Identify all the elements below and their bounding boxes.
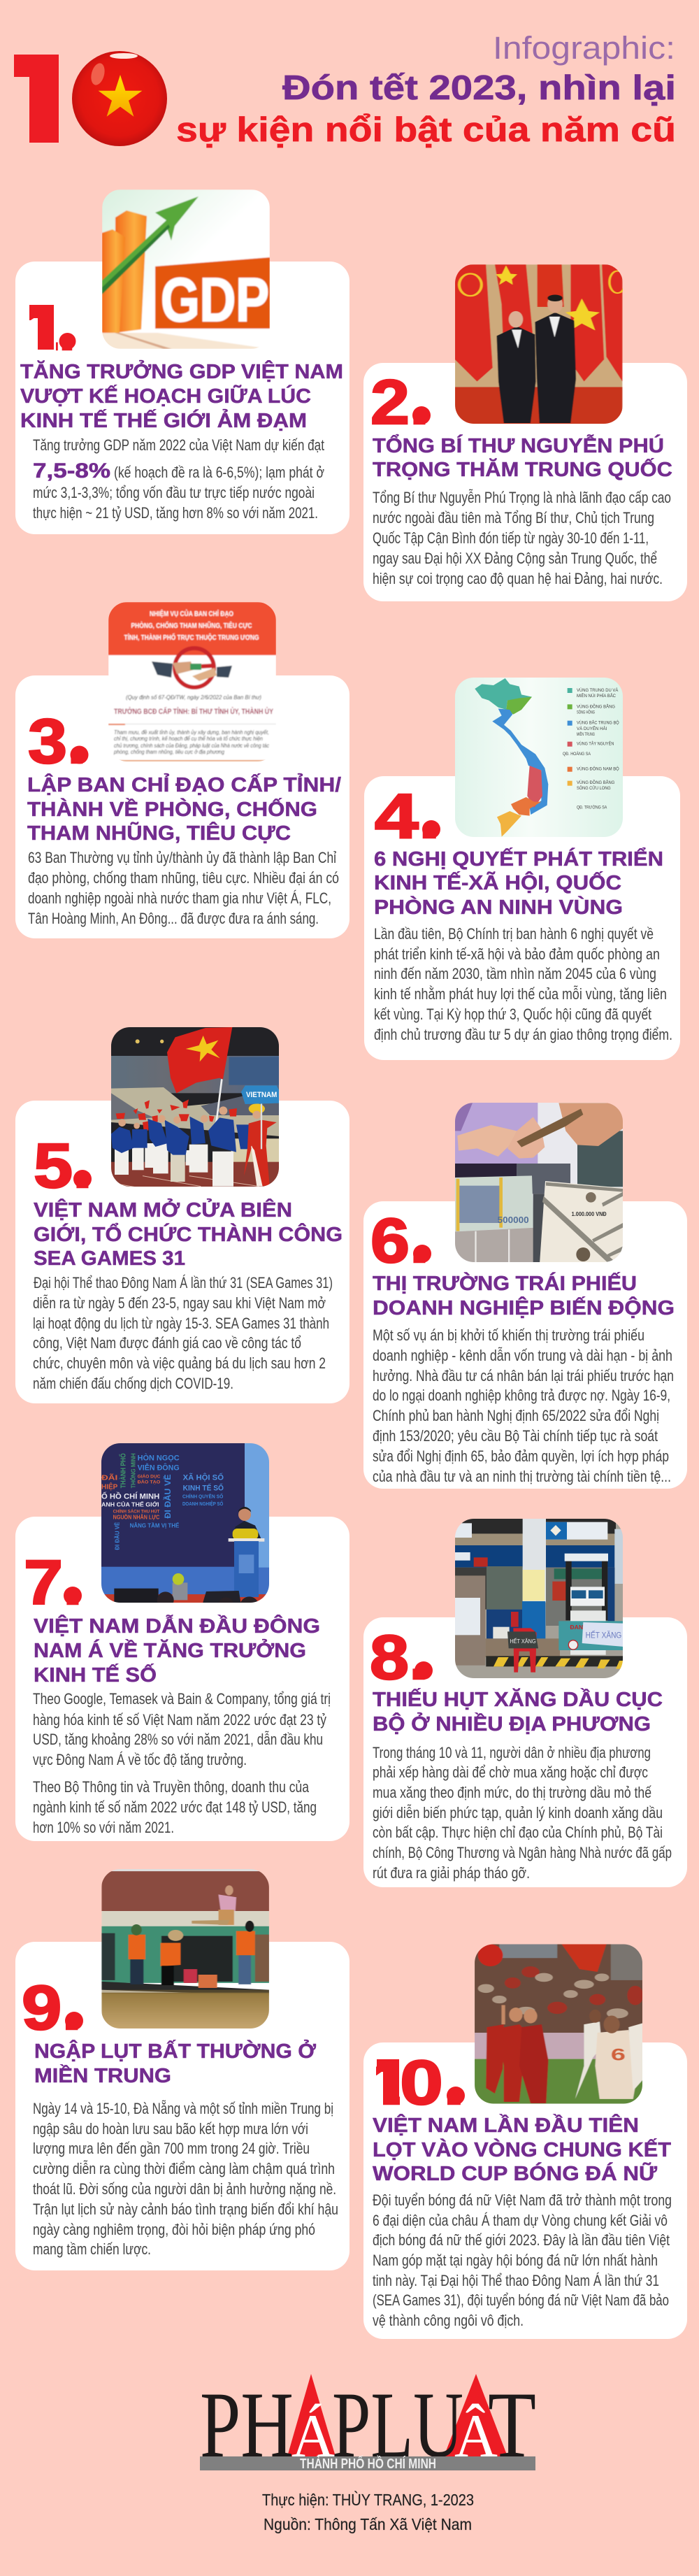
icon: Vietnam flag ball as zero (72, 51, 167, 146)
body text (373, 2191, 672, 2329)
photo: map of Vietnam regions: VÙNG TRUNG DU VÀ (577, 687, 619, 693)
body text: vệ thành công ngôi vô địch. (373, 2312, 524, 2329)
number 3: 3. (28, 707, 87, 777)
photo: digital economy forum: NGUỒN NHÂN LỰC (113, 1514, 160, 1521)
heading: 6 NGHỊ QUYẾT PHÁT TRIỂN (374, 847, 663, 871)
heading: TRỌNG THĂM TRUNG QUỐC (373, 457, 672, 481)
number 4: 4. (375, 782, 440, 852)
heading: THỊ TRƯỜNG TRÁI PHIẾU (373, 1271, 637, 1295)
body text: ngập sâu do hoàn lưu sau bão kết hợp mưa lớn với (33, 2120, 308, 2138)
heading (34, 2039, 316, 2087)
heading: PHÒNG AN NINH VÙNG (374, 895, 623, 919)
body text (33, 2100, 338, 2258)
panel: event 8 fuel shortage (363, 1517, 687, 1887)
heading: NGẬP LỤT BẤT THƯỜNG Ở (34, 2039, 316, 2063)
photo: map of Vietnam regions: VÙNG ĐÔNG NAM BỘ (577, 765, 619, 771)
photo: flood rescue (101, 1869, 269, 2028)
body text: lượng mưa lên đến gần 700 mm trong 24 giờ. Triều (33, 2140, 310, 2157)
body text: mang tầm chiến lược. (33, 2240, 151, 2258)
heading: DOANH NGHIỆP BIẾN ĐỘNG (373, 1296, 675, 1319)
heading: LỌT VÀO VÒNG CHUNG KẾT (373, 2138, 671, 2161)
photo: digital economy forum: DOANH NGHIỆP SỐ (182, 1500, 224, 1507)
body text: 7,5-8% (33, 459, 110, 482)
photo: money and bonds: 500000 (498, 1215, 529, 1225)
photo: digital economy forum: ĐÀO TẠO (138, 1479, 160, 1485)
number 7: 7. (24, 1548, 82, 1618)
number 10: 1 (373, 2048, 403, 2118)
photo: map of Vietnam regions: QĐ. HOÀNG SA (563, 750, 591, 757)
body text: ngày càng nghiêm trọng, đòi hỏi biện pháp ứng phó (33, 2221, 315, 2238)
photo: anti-corruption poster: TRƯỞNG BCĐ CẤP TỈNH: BÍ THƯ TỈNH ỦY, THÀNH ỦY (114, 707, 274, 716)
heading: VIỆT NAM DẪN ĐẦU ĐÔNG (34, 1614, 320, 1638)
logo: Pháp Luật TP.HCM: Á (291, 2403, 335, 2470)
body text (373, 1326, 674, 1485)
body text: Trận lụt lịch sử này cảnh báo tình trạng biến đổi khí hậu (33, 2201, 338, 2218)
photo: digital economy forum: HIỆP (101, 1482, 118, 1491)
body text: chức, chuyên môn và việc quảng bá du lịch sau hơn 2 (33, 1354, 326, 1372)
card background (15, 1942, 350, 2270)
body text: Đại hội Thể thao Đông Nam Á lần thứ 31 (SEA Games 31) (34, 1274, 333, 1291)
heading: KINH TẾ-XÃ HỘI, QUỐC (374, 871, 621, 894)
photo: map of Vietnam regions: VÙNG TÂY NGUYÊN (577, 740, 614, 747)
photo: anti-corruption poster: chủ trương, chính sách của Đảng, pháp luật của Nhà nước về công tác (114, 743, 269, 749)
panel: event 5 SEA Games (15, 1024, 350, 1403)
photo: closed petrol station: ĐAN (570, 1624, 583, 1631)
card background (15, 1517, 350, 1841)
heading: NAM Á VỀ TĂNG TRƯỞNG (34, 1638, 306, 1662)
body text: Theo Bộ Thông tin và Truyền thông, doanh thu của (33, 1778, 310, 1796)
photo: leaders with flags (455, 264, 626, 424)
title: line one: Đón tết 2023, nhìn lại (282, 69, 676, 107)
heading: VIỆT NAM MỞ CỬA BIÊN (34, 1198, 292, 1222)
body text (33, 1690, 331, 1836)
heading: VƯỢT KẾ HOẠCH GIỮA LÚC (20, 384, 311, 408)
heading: SEA GAMES 31 (34, 1247, 185, 1270)
body text (33, 1274, 333, 1392)
number 1: 1. (25, 294, 75, 364)
panel: event 10 women's football (363, 1945, 687, 2339)
photo: map of Vietnam regions: VÙNG BẮC TRUNG BỘ (577, 720, 619, 726)
heading (373, 1687, 663, 1736)
photo: map of Vietnam regions: VÀ DUYÊN HẢI (577, 725, 607, 731)
photo: digital economy forum: ĐI ĐẦU VỀ (114, 1522, 121, 1550)
header (14, 36, 674, 148)
heading (34, 1614, 320, 1687)
photo: anti-corruption poster: NHIỆM VỤ CỦA BAN CHỈ ĐẠO (150, 609, 233, 618)
photo: digital economy forum: ĐÃI (101, 1473, 118, 1482)
panel: event 3 anti-corruption (15, 602, 350, 938)
logo: Pháp Luật TP.HCM (200, 2373, 536, 2477)
heading: GIỚI, TỔ CHỨC THÀNH CÔNG (34, 1222, 343, 1246)
heading: THAM NHŨNG, TIÊU CỰC (27, 821, 291, 845)
panel: event 2 China visit (363, 264, 687, 601)
heading (20, 359, 343, 432)
photo: digital economy forum: CHÍNH SÁCH THU HÚT (113, 1508, 159, 1514)
body text: đạo phòng, chống tham nhũng, tiêu cực. Nhiều đại án có (28, 869, 339, 887)
photo: anti-corruption poster: chỉ thị, chương trình, kế hoạch để cụ thể hóa và tổ chức thực hiện (114, 736, 263, 742)
card background (15, 675, 350, 938)
heading: MIỀN TRUNG (34, 2063, 171, 2087)
body text (33, 436, 324, 522)
body text: Theo Google, Temasek và Bain & Company, tổng giá trị (33, 1690, 331, 1708)
heading (27, 773, 341, 845)
body text: lại hoạt động du lịch từ ngày 15-3. SEA Games 31 thành (33, 1315, 329, 1332)
number 5: 5. (34, 1131, 92, 1201)
body text: Ngày 14 và 15-10, Đà Nẵng và một số tỉnh miền Trung bị (33, 2100, 333, 2117)
heading (374, 847, 663, 919)
panel: event 1 GDP (15, 189, 350, 534)
photo: digital economy forum: VIỄN ĐÔNG (138, 1464, 180, 1473)
heading (373, 2113, 671, 2185)
photo: digital economy forum: CHÍNH QUYỀN SỐ (182, 1493, 224, 1500)
body text: cường diễn ra cùng thời điểm càng làm chậm quá trình (33, 2160, 335, 2177)
heading: TỔNG BÍ THƯ NGUYỄN PHÚ (373, 434, 664, 457)
body text: năm chiến đấu chống dịch COVID-19. (33, 1375, 233, 1392)
photo: closed petrol station: HẾT XĂNG (586, 1630, 621, 1640)
photo: women's football team: 6 (611, 2045, 626, 2064)
photo: closed petrol station (452, 1517, 626, 1685)
panel: event 7 digital economy (15, 1440, 350, 1841)
photo: money and bonds (452, 1101, 626, 1268)
body text: Tân Hoàng Minh, An Đông... đã được đưa ra ánh sáng. (28, 910, 319, 927)
photo: anti-corruption poster: Tham mưu, đề xuất tỉnh ủy, thành ủy xây dựng, ban hành nghị quyết, (114, 729, 269, 736)
card background (15, 262, 350, 534)
photo: anti-corruption poster: PHÒNG, CHỐNG THAM NHŨNG, TIÊU CỰC (131, 620, 252, 630)
heading: VIỆT NAM LẦN ĐẦU TIÊN (373, 2113, 639, 2137)
photo: map of Vietnam regions (452, 675, 626, 843)
logo: Pháp Luật TP.HCM: PH (200, 2373, 294, 2477)
photo: SEA Games parade (108, 1024, 282, 1192)
photo: map of Vietnam regions: VÙNG ĐỒNG BẰNG (577, 702, 615, 709)
panel: event 9 floods (15, 1869, 350, 2270)
card background (15, 1101, 350, 1403)
heading: BỘ Ở NHIỀU ĐỊA PHƯƠNG (373, 1712, 651, 1736)
body text (374, 925, 672, 1043)
photo: GDP chart: GDP (161, 265, 269, 334)
card background (364, 776, 680, 1060)
heading: WORLD CUP BÓNG ĐÁ NỮ (373, 2161, 658, 2185)
photo: GDP chart (102, 189, 270, 349)
title: line two: sự kiện nổi bật của năm cũ (176, 111, 676, 149)
body text: USD, tăng khoảng 28% so với năm 2021, dẫn đầu khu (33, 1731, 323, 1748)
number 1 (29, 305, 75, 351)
logo: Pháp Luật TP.HCM: THÀNH PHỐ HỒ CHÍ MINH (300, 2455, 436, 2472)
card background (363, 1617, 687, 1887)
body text: vực Đông Nam Á về tốc độ tăng trưởng. (33, 1751, 247, 1768)
photo: SEA Games parade: VIETNAM (246, 1091, 277, 1099)
photo: map of Vietnam regions: SÔNG CỬU LONG (577, 785, 611, 791)
photo: map of Vietnam regions: QĐ. TRƯỜNG SA (577, 804, 607, 810)
body text: thoát lũ. Đời sống của người dân bị ảnh hưởng nặng nề. (33, 2180, 336, 2198)
photo: digital economy forum: ĐI ĐẦU VỀ (162, 1474, 173, 1519)
heading: THÀNH VỀ PHÒNG, CHỐNG (27, 797, 317, 821)
photo: closed petrol station: HẾT XĂNG (510, 1638, 536, 1645)
photo: digital economy forum: ANH CỦA THẾ GIỚI (101, 1500, 159, 1508)
number 10: 0. (400, 2048, 465, 2118)
body text: mức 3,1-3,3%; tổng vốn đầu tư trực tiếp nước ngoài (33, 484, 315, 501)
card background (363, 363, 687, 601)
photo: women's football team (475, 1945, 643, 2105)
logo: Pháp Luật TP.HCM: T (488, 2373, 536, 2477)
photo: anti-corruption poster: phòng, chống tham nhũng, tiêu cực ở địa phương (113, 749, 224, 755)
body text: rút đưa ra giải pháp tháo gỡ. (373, 1864, 530, 1882)
body text: hàng hóa kinh tế số Việt Nam năm 2022 ước đạt 23 tỷ (33, 1711, 326, 1729)
photo: digital economy forum: THÀNH PHỐ (117, 1453, 127, 1488)
logo: Pháp Luật TP.HCM: PLU (332, 2373, 463, 2477)
credits: Thực hiện: THÙY TRANG, 1-2023 (262, 2491, 474, 2509)
photo: money and bonds: 1.000.000 VNĐ (572, 1211, 607, 1217)
body text: doanh nghiệp ngoài nhà nước tham gia như Việt Á, FLC, (28, 889, 331, 907)
heading: KINH TẾ SỐ (34, 1663, 157, 1687)
heading: KINH TẾ THẾ GIỚI ẢM ĐẠM (20, 408, 307, 432)
photo: digital economy forum: XÃ HỘI SỐ (183, 1473, 224, 1482)
body text: diễn ra từ ngày 5 đến 23-5, ngay sau khi Việt Nam mở (33, 1294, 326, 1312)
number 2: 2. (370, 368, 429, 438)
number 8: 8. (370, 1623, 428, 1693)
logo: Pháp Luật TP.HCM: Â (454, 2403, 498, 2470)
photo: digital economy forum: NÂNG TẦM VỊ THẾ (130, 1522, 180, 1529)
body text: Tăng trưởng GDP năm 2022 của Việt Nam dự kiến đạt (33, 436, 324, 454)
credits (262, 2491, 474, 2533)
photo: map of Vietnam regions: MIỀN TRUNG (577, 730, 595, 737)
photo: digital economy forum: GIÁO DỤC (138, 1473, 161, 1479)
body text (373, 489, 671, 587)
body text (28, 849, 339, 927)
heading: THIẾU HỤT XĂNG DẦU CỤC (373, 1687, 663, 1711)
photo: anti-corruption poster (108, 602, 276, 761)
body text (373, 1744, 672, 1882)
photo: anti-corruption poster: TỈNH, THÀNH PHỐ TRỰC THUỘC TRUNG ƯƠNG (124, 632, 259, 642)
body text: hơn 10% so với năm 2021. (33, 1819, 174, 1836)
number 10 (376, 2059, 465, 2106)
heading: TĂNG TRƯỞNG GDP VIỆT NAM (20, 359, 343, 383)
body text: ngành kinh tế số năm 2022 ước đạt 148 tỷ USD, tăng (33, 1798, 317, 1816)
photo: digital economy forum: KINH TẾ SỐ (183, 1482, 224, 1492)
number 9: 9. (22, 1973, 82, 2043)
heading (373, 434, 672, 481)
photo: map of Vietnam regions: VÙNG ĐỒNG BẰNG (577, 778, 614, 785)
heading (34, 1198, 343, 1270)
big number ten: digit one (14, 55, 59, 143)
body text: thực hiện ~ 21 tỷ USD, tăng hơn 8% so với năm 2021. (33, 504, 318, 522)
title: kicker: Infographic: (493, 30, 675, 66)
body text: (kế hoạch đề ra là 6-6,5%); lạm phát ở (114, 464, 324, 481)
heading (373, 1271, 675, 1319)
heading: LẬP BAN CHỈ ĐẠO CẤP TỈNH/ (27, 773, 341, 796)
number 6: 6. (370, 1206, 429, 1276)
panel: event 4 regional resolutions (364, 675, 680, 1060)
photo: map of Vietnam regions: MIỀN NÚI PHÍA BẮC (577, 692, 616, 699)
photo: map of Vietnam regions: SÔNG HỒNG (577, 708, 595, 715)
photo: digital economy forum: HÒN NGỌC (138, 1453, 180, 1462)
photo: anti-corruption poster: (Quy định số 67-QĐ/TW, ngày 2/6/2022 của Ban Bí thư) (126, 694, 261, 701)
photo: digital economy forum: Ố HỒ CHÍ MINH (101, 1491, 159, 1501)
body text: Một số vụ án bị khởi tố khiến thị trường trái phiếu (373, 1326, 644, 1344)
body text: 63 Ban Thường vụ tỉnh ủy/thành ủy đã thành lập Ban Chỉ (28, 849, 336, 866)
card background (363, 1201, 687, 1489)
photo: digital economy forum (101, 1443, 269, 1603)
credits: Nguồn: Thông Tấn Xã Việt Nam (264, 2515, 472, 2533)
panel: event 6 corporate bonds (363, 1101, 687, 1489)
body text: công, Việt Nam được đánh giá cao về công tác tổ (33, 1334, 301, 1352)
photo: digital economy forum: THÔNG MINH (129, 1453, 136, 1488)
card background (363, 2042, 687, 2339)
